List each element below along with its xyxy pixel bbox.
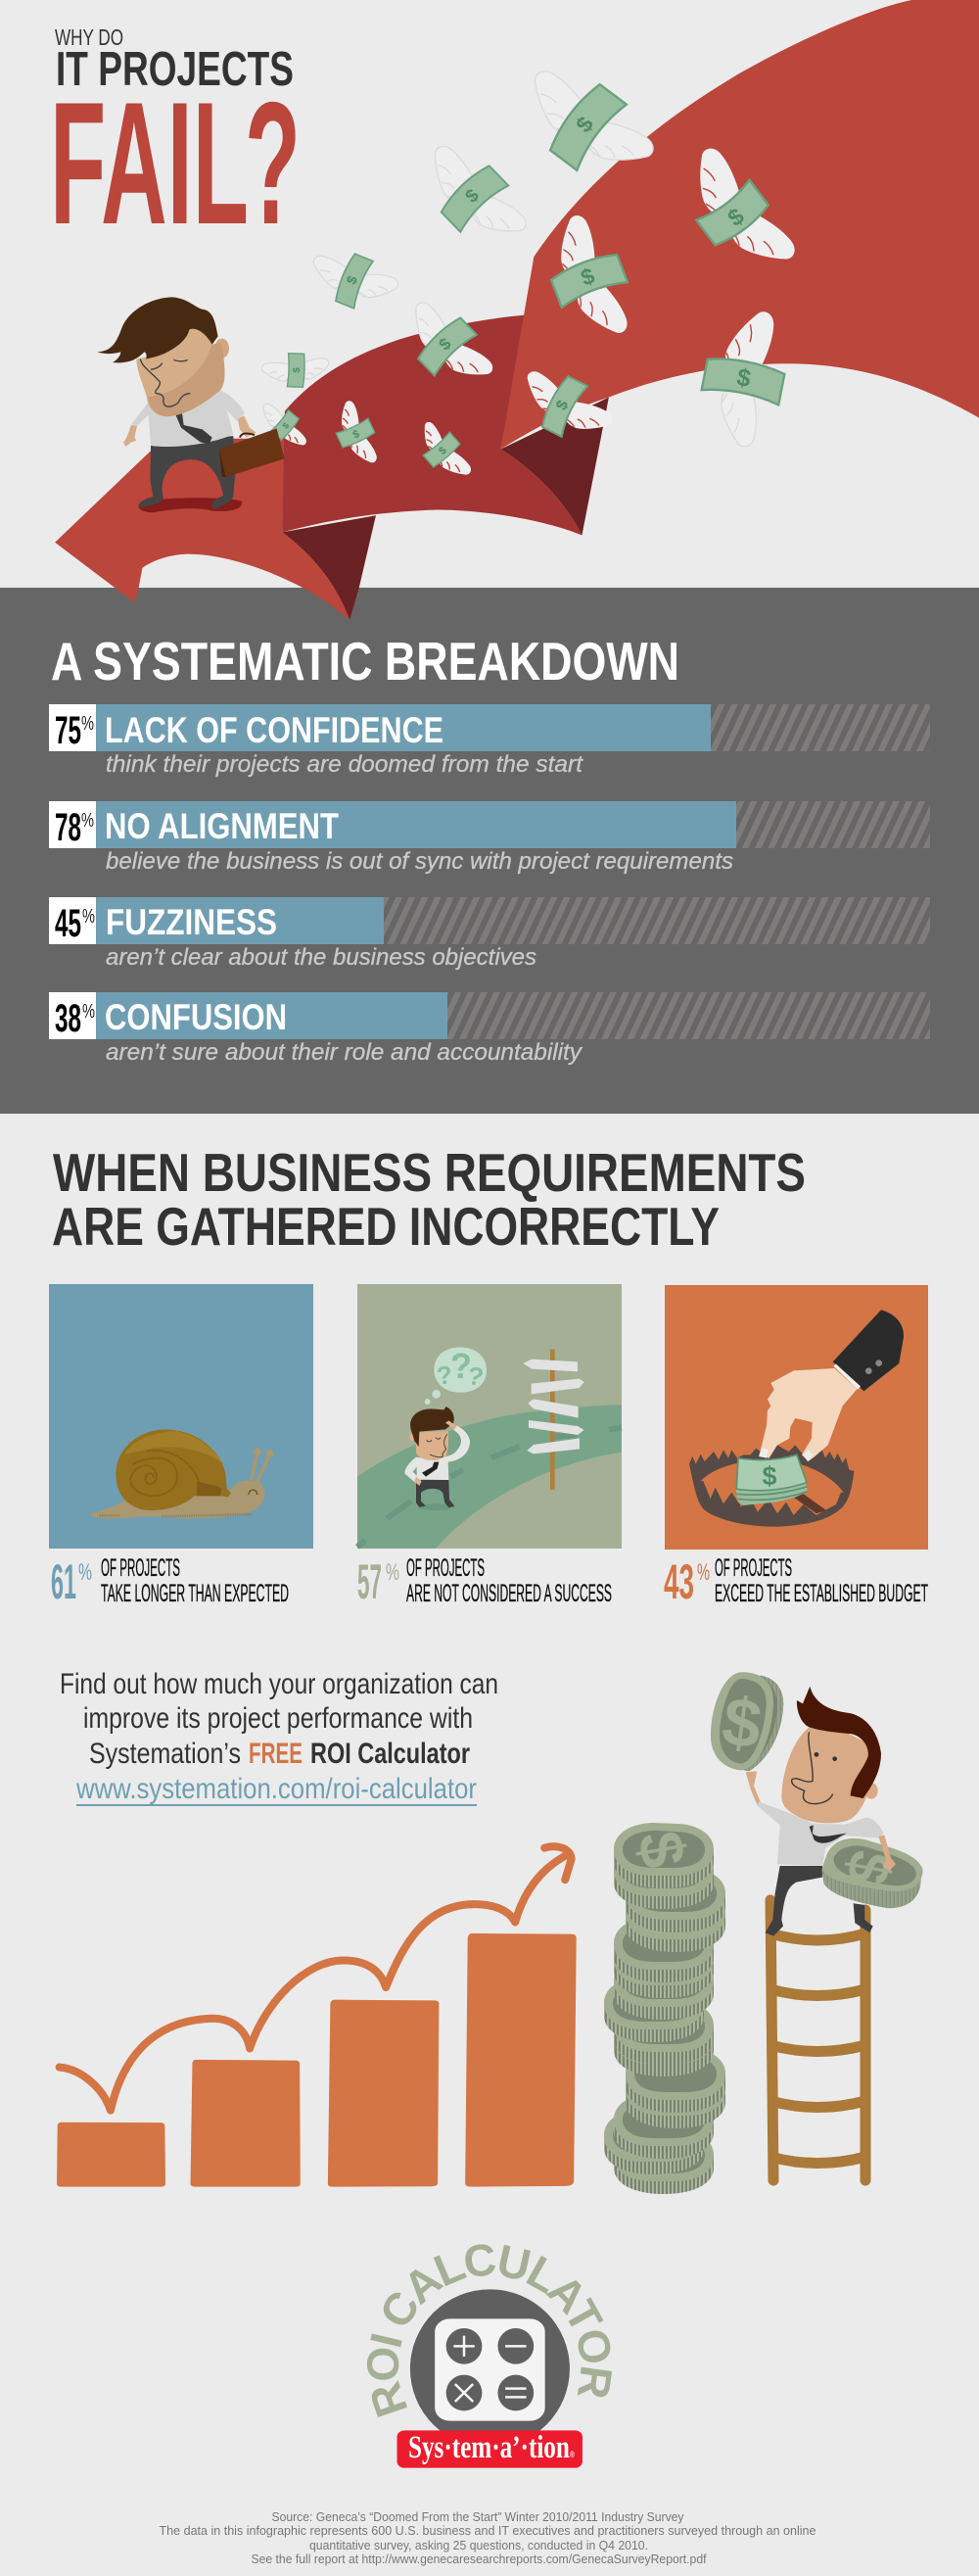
bill G [336,418,375,449]
coin stack [604,1823,725,2194]
icon: snail [89,1429,274,1518]
caption: 57% [357,1554,612,1609]
bill G: $ [351,428,361,442]
bill A [545,81,627,170]
bill E: $ [292,367,303,373]
heading: when business requirements are gathered incorrectly [52,1142,806,1257]
bill D: $ [436,334,455,355]
caption: 57%: % [386,1559,399,1586]
caption: 57%: OF PROJECTS [406,1554,485,1582]
icon: dollar on raised coin: $ [718,1683,767,1763]
curved title text: ROI CALCULATOR [366,2244,613,2417]
ribbon front section [55,439,350,620]
title line: fail: ? [245,66,301,261]
title line: why do: WHY DO [55,24,123,50]
bar row: confusion 38% [49,992,930,1066]
bar row: confusion 38%: 38 [55,997,81,1040]
bill J [538,374,587,437]
bill J: $ [553,398,572,413]
caption: 43%: OF PROJECTS [715,1554,792,1582]
bill C: $ [343,273,360,286]
caption: 61%: % [78,1559,92,1586]
bar row: fuzziness 45%: 45 [55,902,81,945]
hero: sad businessman with briefcase [97,297,285,512]
illustration: hand reaching into bear trap [689,1310,904,1527]
bar row: fuzziness 45% [49,897,930,971]
chart bars [57,1933,577,2187]
question marks: ? [450,1346,472,1386]
caption: 43%: 43 [664,1554,694,1609]
bill E [287,354,305,387]
icon: dollar on held coin: $ [834,1846,904,1889]
bar row: no alignment 78% [49,801,930,875]
bill K: $ [723,203,750,232]
bar row: lack of confidence 75%: think their projects are doomed from the start [106,751,583,778]
bill F [271,410,300,441]
hero: red ribbon arrow [55,0,979,620]
call to action text: ROI Calculator [310,1738,470,1770]
bill L: $ [734,363,753,393]
logo: roi calculator [366,2244,613,2468]
bar row: lack of confidence 75%: 75 [55,709,81,752]
call to action text: Systemation’s [89,1738,241,1770]
source footnote [159,2509,816,2566]
caption: 61%: OF PROJECTS [101,1554,180,1582]
bill I: $ [578,262,598,291]
arm over held coin [878,1835,896,1871]
heading: when business requirements are gathered incorrectly: ARE GATHERED INCORRECTLY [52,1196,720,1257]
bar row: fuzziness 45%: aren’t clear about the business objectives [106,944,536,971]
title line: fail: FAIL [50,66,249,261]
ribbon fold left [282,515,376,620]
call to action text: www.systemation.com/roi-calculator [75,1773,477,1805]
bar row: confusion 38%: % [82,1001,95,1023]
question marks: ? [436,1360,453,1391]
title line: it projects: IT PROJECTS [56,43,294,96]
ladder [770,1900,865,2180]
illustration: road, signpost and confused man [357,1347,622,1549]
ribbon middle section [282,314,582,535]
icon: dollar sign on money: $ [762,1461,777,1491]
bill H [423,432,461,468]
caption: 61%: 61 [51,1554,76,1609]
bill L [702,355,785,405]
bar row: confusion 38%: CONFUSION [105,997,287,1037]
panel: lost man at signpost [357,1284,622,1549]
bar row: no alignment 78%: 78 [55,806,81,849]
bar row: confusion 38%: aren’t sure about their role and accountability [106,1039,583,1066]
bar row: lack of confidence 75% [49,704,930,778]
caption: 57%: 57 [357,1554,382,1609]
panel: money trap [665,1285,928,1550]
heading: a systematic breakdown: A SYSTEMATIC BREAKDOWN [51,631,679,692]
bill B [438,163,508,232]
arc path for curved title [398,2275,581,2409]
call to action text [60,1668,498,1806]
heading: when business requirements are gathered incorrectly: WHEN BUSINESS REQUIREMENTS [53,1142,806,1203]
calculator icon [397,2289,583,2468]
bill I [549,250,628,308]
bar row: fuzziness 45%: % [82,906,95,928]
bar row: no alignment 78%: believe the business is out of sync with project requirements [106,848,733,875]
rising arrow [60,1846,572,2111]
happy man on ladder holding coins [711,1672,923,1936]
bar row: lack of confidence 75%: LACK OF CONFIDENCE [105,710,443,750]
bill H: $ [437,445,449,457]
bill C [333,253,373,309]
bar row: fuzziness 45%: FUZZINESS [106,902,277,942]
text: TAKE LONGER THAN EXPECTED [101,1580,289,1607]
panel: systematic breakdown background [0,588,979,1114]
title [50,24,301,261]
bill B: $ [461,185,484,208]
caption: 61% [51,1554,289,1609]
ribbon fold middle [501,398,609,535]
source footnote: The data in this infographic represents 600 U.S. business and IT executives and practitioners surveyed through an online [159,2523,816,2538]
bill F: $ [280,421,291,431]
caption: 43%: % [697,1559,710,1586]
caption: 43% [664,1554,928,1609]
source footnote: See the full report at http://www.genecaresearchreports.com/GenecaSurveyReport.pdf [251,2552,707,2566]
title line: fail [50,66,301,261]
call to action text: Find out how much your organization can [60,1668,498,1700]
bill K [696,180,771,249]
flying money [257,64,801,483]
text: ARE NOT CONSIDERED A SUCCESS [406,1580,612,1607]
bill D [415,315,477,375]
bar row: no alignment 78%: NO ALIGNMENT [105,806,339,846]
icon: dollar on top coin: $ [624,1826,700,1873]
question marks: ? [465,1360,486,1392]
source footnote: Source: Geneca’s “Doomed From the Start” Winter 2010/2011 Industry Survey [272,2509,684,2524]
bar chart with rising arrow [57,1846,577,2187]
call to action text: FREE [249,1738,303,1770]
call to action text: improve its project performance with [83,1702,473,1735]
bar row: no alignment 78%: % [81,810,94,832]
ribbon rear section [501,0,979,449]
source footnote: quantitative survey, asking 25 questions, conducted in Q4 2010. [309,2538,648,2552]
panel: snail [49,1284,313,1549]
wings [257,64,801,483]
bar row: lack of confidence 75%: % [81,713,94,735]
systemation wordmark: Sys·tem·a’·tion® [408,2430,575,2465]
bill A: $ [571,112,598,137]
question marks [436,1346,486,1392]
